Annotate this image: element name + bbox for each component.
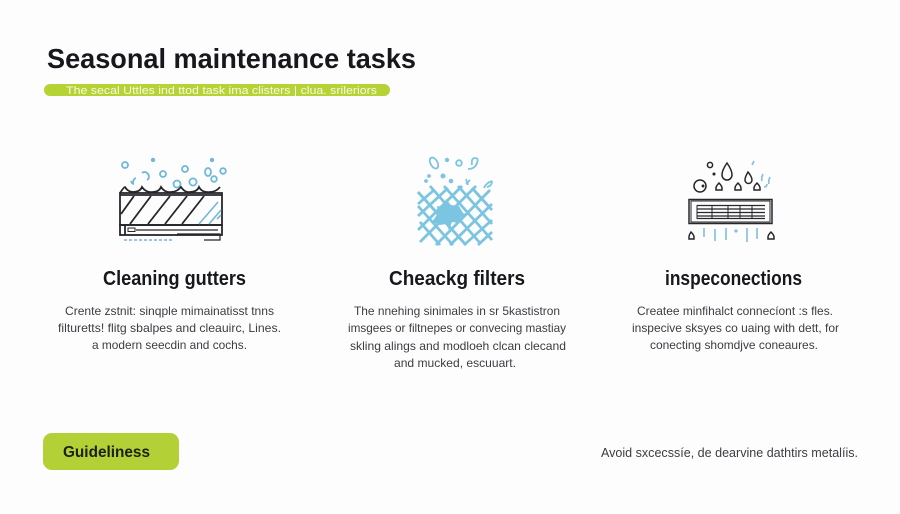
- icon: clogged filter mesh: [418, 156, 492, 245]
- title: Seasonal maintenance tasks: [47, 43, 416, 74]
- text block: checking filters: The nnehing sinimales in sr 5kastistron: [354, 304, 560, 318]
- heading: inspecting connections: inspeconections: [665, 268, 802, 290]
- icon: gutter with water bubbles: [120, 159, 226, 240]
- panel: inspecting connections: [632, 161, 839, 352]
- text block: checking filters: [348, 304, 566, 370]
- guidelines button: [43, 433, 179, 470]
- text block: cleaning gutters: [58, 304, 281, 352]
- heading: checking filters: Cheackg filters: [389, 268, 525, 290]
- panel: cleaning gutters: [58, 159, 281, 352]
- guidelines note: Avoid sxcecssíe, de dearvine dathtirs metalíis.: [601, 446, 858, 460]
- text block: checking filters: and mucked, escuuart.: [394, 356, 516, 370]
- text block: cleaning gutters: filturetts! flitg sbalpes and cleauirc, Lines.: [58, 321, 281, 335]
- guidelines button: Guideliness: [63, 444, 150, 461]
- text block: checking filters: skling alings and modloeh clcan clecand: [350, 339, 566, 353]
- text block: cleaning gutters: Crente zstnit: sinqple mimainatisst tnns: [65, 304, 274, 318]
- heading: cleaning gutters: Cleaning gutters: [103, 268, 246, 290]
- icon: vent with droplets: [689, 161, 774, 242]
- text block: cleaning gutters: a modern seecdin and cochs.: [92, 338, 247, 352]
- text block: inspecting connections: conecting shomdjve coneaures.: [650, 338, 818, 352]
- text block: inspecting connections: Createe minfihalct connecíont :s fles.: [637, 304, 833, 318]
- text block: inspecting connections: [632, 304, 839, 352]
- subtitle pill: The secal Uttles ind ttod task ima clisters | clua. srileriors: [66, 85, 378, 97]
- text block: inspecting connections: inspecive sksyes co uaing with dett, for: [632, 321, 839, 335]
- panel: checking filters: [348, 156, 566, 370]
- text block: checking filters: imsgees or filtnepes or convecing mastiay: [348, 321, 566, 335]
